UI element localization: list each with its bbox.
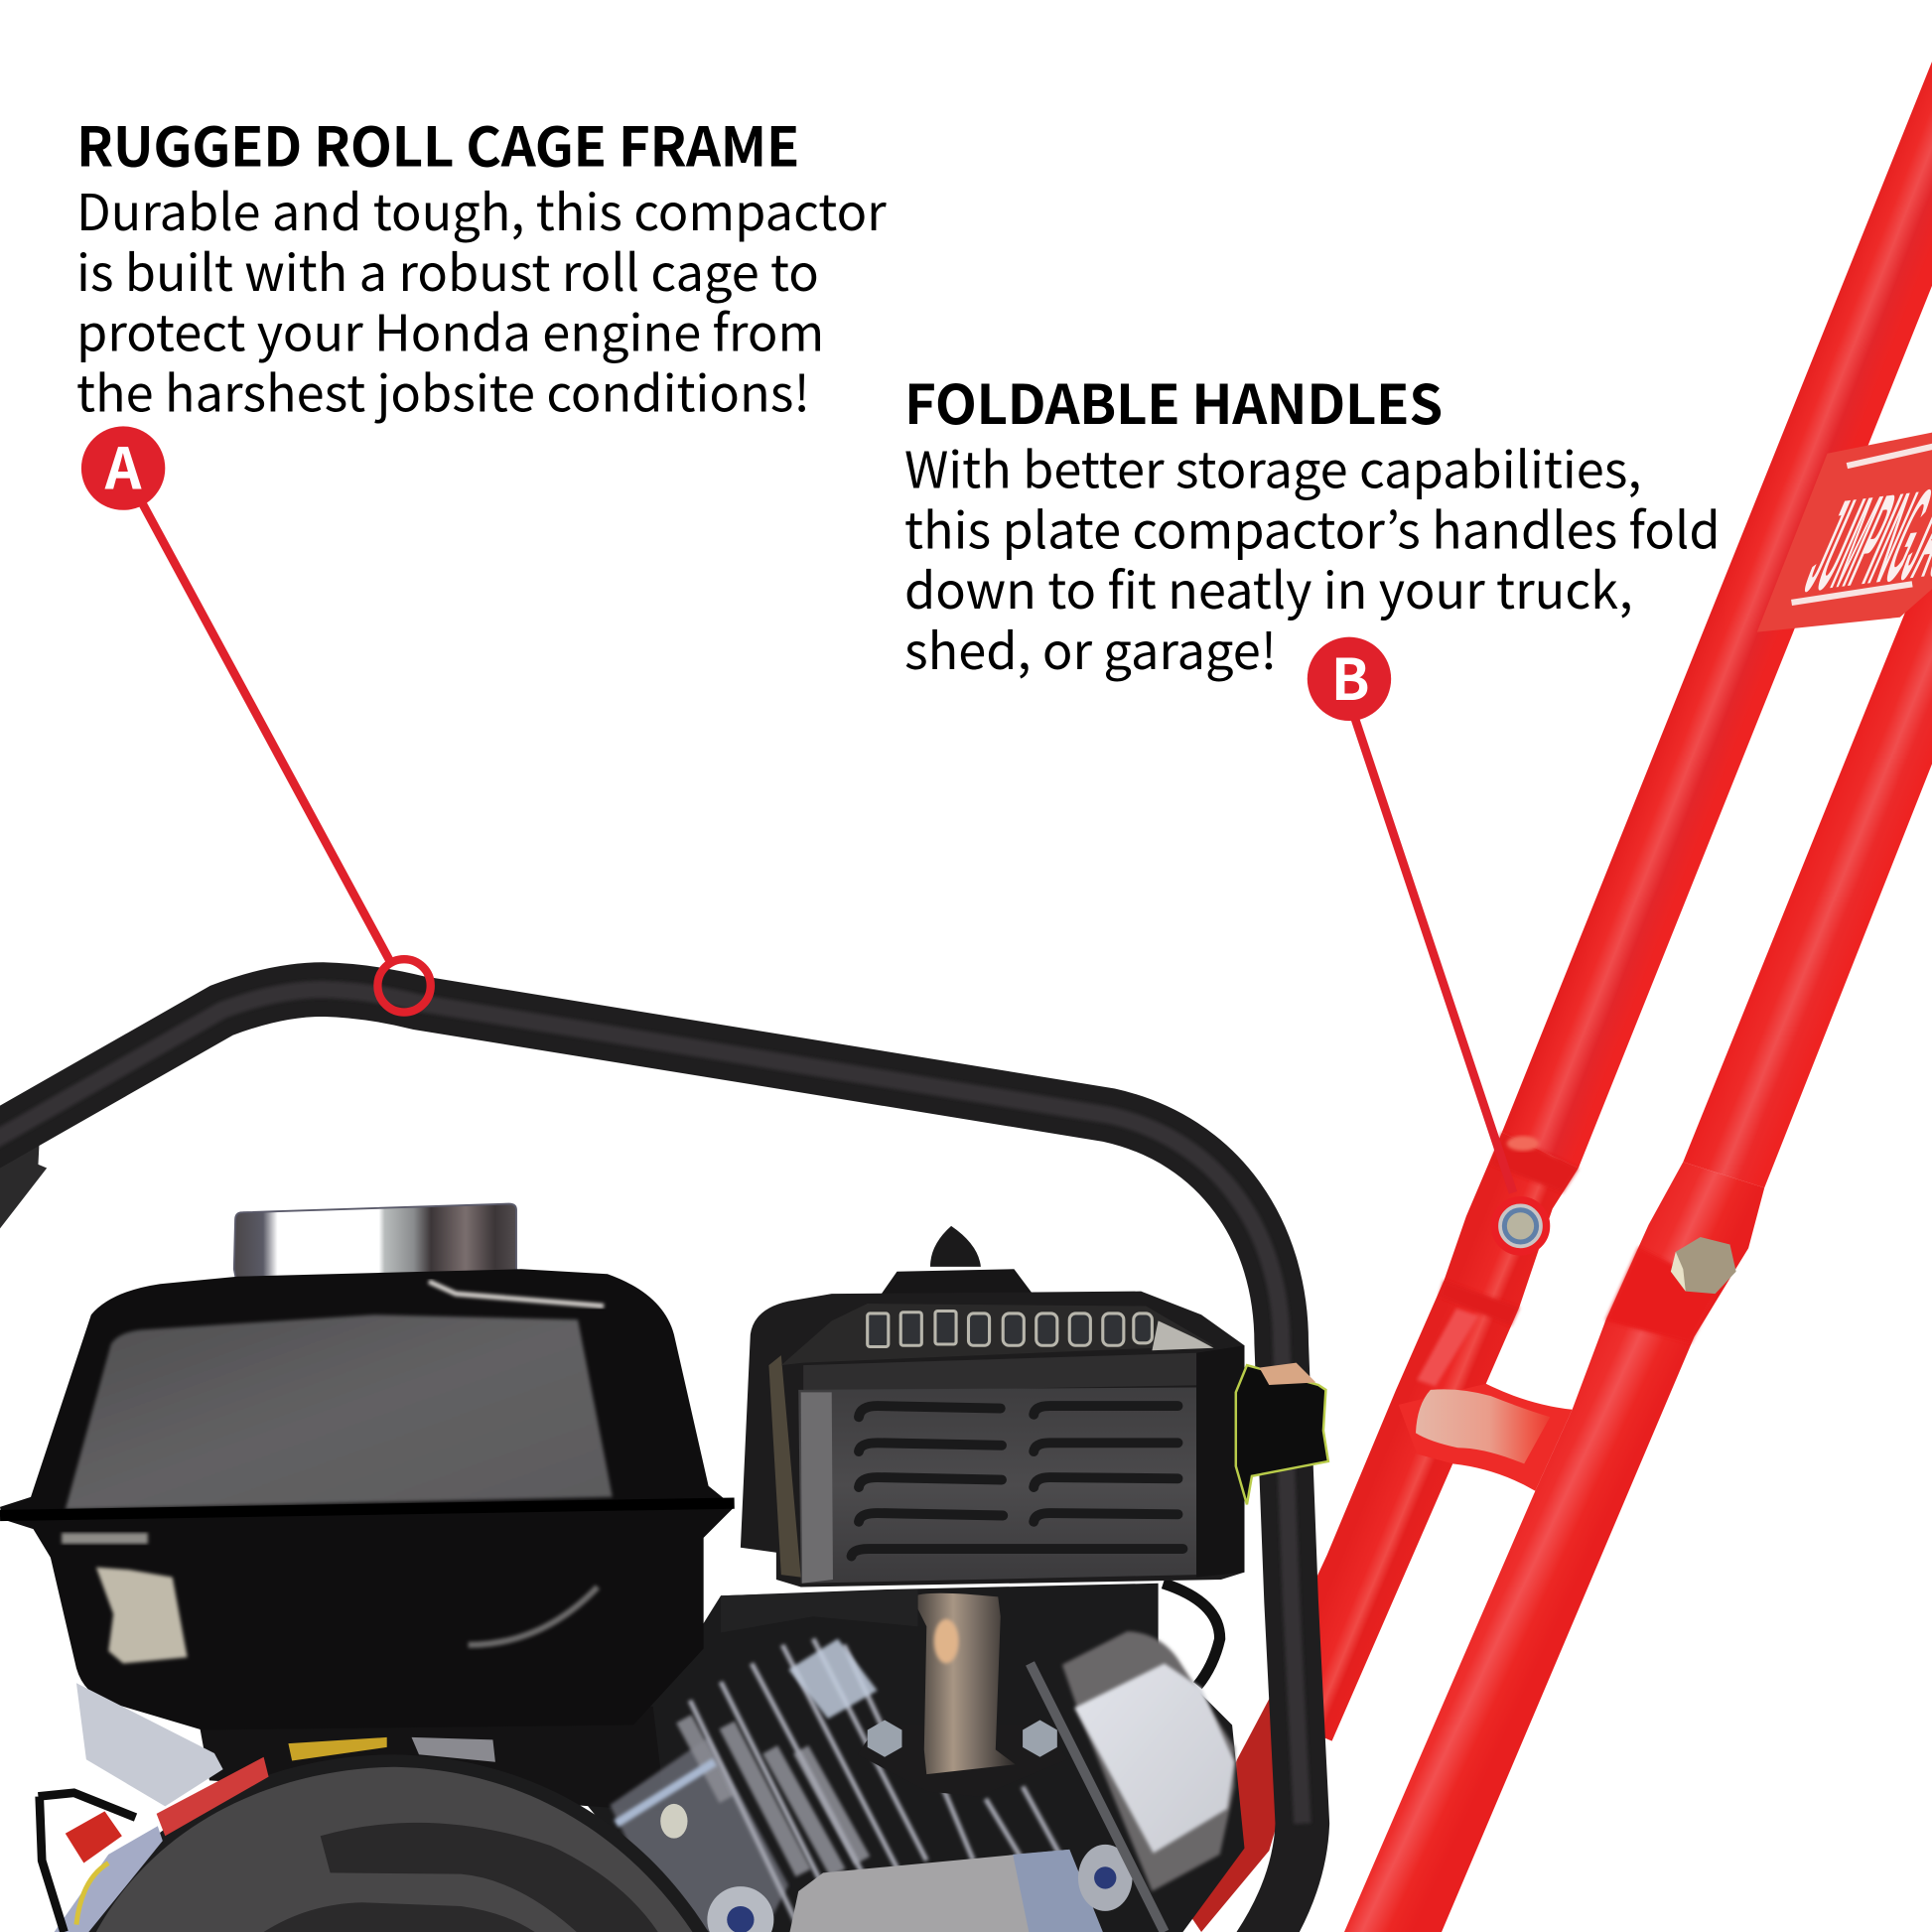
fixed hex bolt (1671, 1237, 1736, 1294)
roll cage lower left gusset (0, 1134, 47, 1228)
body: roll cage description: protect your Honda engine from (76, 293, 824, 366)
vent strip right chrome (1152, 1320, 1213, 1350)
mounting bolt (1078, 1845, 1133, 1911)
upper cover band (803, 1353, 1213, 1392)
banner upper stripe (1847, 445, 1932, 466)
red connector (66, 1811, 122, 1863)
right handle tube, lower section with joint (1344, 1162, 1764, 1932)
dark lower frame member behind engine (1180, 1676, 1307, 1932)
vent strip (781, 1304, 1213, 1365)
body: foldable handles description: down to fit neatly in your truck, (904, 550, 1633, 623)
red folding handle frame (1180, 62, 1932, 1932)
body: foldable handles description: this plate compactor’s handles fold (904, 489, 1721, 563)
tank seam (0, 1503, 735, 1516)
tank body (0, 1269, 735, 1729)
callout A letter: A (104, 425, 142, 506)
air filter housing (741, 1226, 1328, 1587)
tag label strip blue white (55, 1826, 163, 1932)
tag label strip red (157, 1757, 269, 1836)
chrome fuel cap (234, 1204, 523, 1282)
callout A badge (81, 426, 165, 510)
body: roll cage description: Durable and tough, this compactor (76, 172, 887, 245)
callout A (81, 425, 431, 1013)
dark ring behind starter (81, 1754, 709, 1932)
body: roll cage description: is built with a robust roll cage to (76, 232, 819, 306)
callout B target ring (1494, 1200, 1547, 1252)
text block: foldable handles (904, 361, 1721, 684)
lower bolt boss (707, 1886, 773, 1932)
black hose (1164, 1584, 1220, 1686)
right handle tube, upper section (1683, 546, 1932, 1187)
rim highlight (62, 1533, 148, 1544)
callout B leader line (1351, 709, 1513, 1192)
starter inner dark patch (321, 1823, 658, 1932)
banner stripes and brand (1789, 445, 1932, 620)
exhaust pipe (911, 1593, 1016, 1774)
recoil starter assembly (38, 1683, 709, 1932)
right side dark panel (1196, 1345, 1244, 1578)
filter body (741, 1292, 1244, 1587)
callout A leader line (138, 495, 390, 962)
lower tank reflection (96, 1568, 188, 1663)
exhaust flange (858, 1725, 1067, 1796)
body: roll cage description: the harshest jobsite conditions! (76, 353, 810, 427)
cooling fins (690, 1639, 1059, 1932)
louvres (852, 1406, 1182, 1556)
shroud plate (790, 1850, 1103, 1932)
back body tan edge (768, 1355, 801, 1578)
muffler cover (1062, 1631, 1235, 1891)
filter clamp (1236, 1363, 1328, 1504)
engine block base (542, 1584, 1244, 1932)
filter knob (930, 1226, 981, 1267)
front left highlight (801, 1392, 833, 1584)
folding hinge bolt (1496, 1201, 1545, 1251)
silver bracket (76, 1683, 223, 1806)
cap base highlight (429, 1282, 604, 1307)
right joint collar (1605, 1247, 1719, 1343)
starter centre hub (264, 1902, 535, 1932)
callout A target ring (377, 959, 431, 1013)
roll cage tube (0, 990, 1303, 1932)
engine (198, 1584, 1244, 1932)
muffler bracket strap (1031, 1663, 1165, 1932)
fuel tank (0, 1204, 735, 1729)
blue-white head highlights (788, 1639, 878, 1719)
banner plate (1757, 433, 1932, 632)
round plug (660, 1804, 688, 1839)
banner lower stripe (1792, 584, 1912, 603)
black roll cage frame (0, 990, 1303, 1932)
vent slots (868, 1311, 1152, 1346)
heading: foldable handles: FOLDABLE HANDLES (904, 361, 1443, 440)
front louvre panel (798, 1387, 1196, 1584)
yellow wire (76, 1863, 108, 1925)
lower tank curved reflection (469, 1587, 598, 1645)
callout B (1308, 635, 1547, 1252)
bracket bar under air filter (721, 1589, 918, 1632)
dark fill below tank (198, 1707, 665, 1811)
text block: rugged roll cage frame (76, 104, 887, 427)
cross brace pale face (1416, 1389, 1550, 1463)
wide grey cylinder bands (684, 1719, 863, 1872)
callout B letter: B (1331, 635, 1370, 717)
upper tank reflection (66, 1314, 613, 1509)
exhaust hot spot (934, 1619, 959, 1663)
heading: rugged roll cage frame: RUGGED ROLL CAGE FRAME (76, 104, 799, 183)
left tube reflection (1417, 1309, 1478, 1386)
left joint highlight (1507, 1136, 1539, 1151)
diagonal crankcase rib (617, 1762, 715, 1824)
left joint collar (1440, 1133, 1579, 1325)
grey warning label (412, 1737, 495, 1762)
callout B badge (1308, 637, 1391, 721)
left handle tube, upper section (1502, 62, 1932, 1169)
body: foldable handles description: With better storage capabilities, (904, 429, 1641, 502)
yellow label (288, 1737, 387, 1760)
flange nut left (868, 1721, 901, 1757)
crankcase grey left panel (610, 1737, 788, 1932)
filter cap (880, 1269, 1033, 1297)
flange nut right (1023, 1721, 1057, 1757)
left handle tube, lower section with joint (1294, 1133, 1579, 1741)
roll cage tube highlight (0, 990, 1303, 1824)
cross brace between tubes (1399, 1384, 1573, 1491)
starter cover (96, 1767, 692, 1932)
wire loop (38, 1793, 136, 1932)
body: foldable handles description: shed, or garage! (904, 611, 1277, 684)
shroud blue side (1013, 1850, 1103, 1932)
